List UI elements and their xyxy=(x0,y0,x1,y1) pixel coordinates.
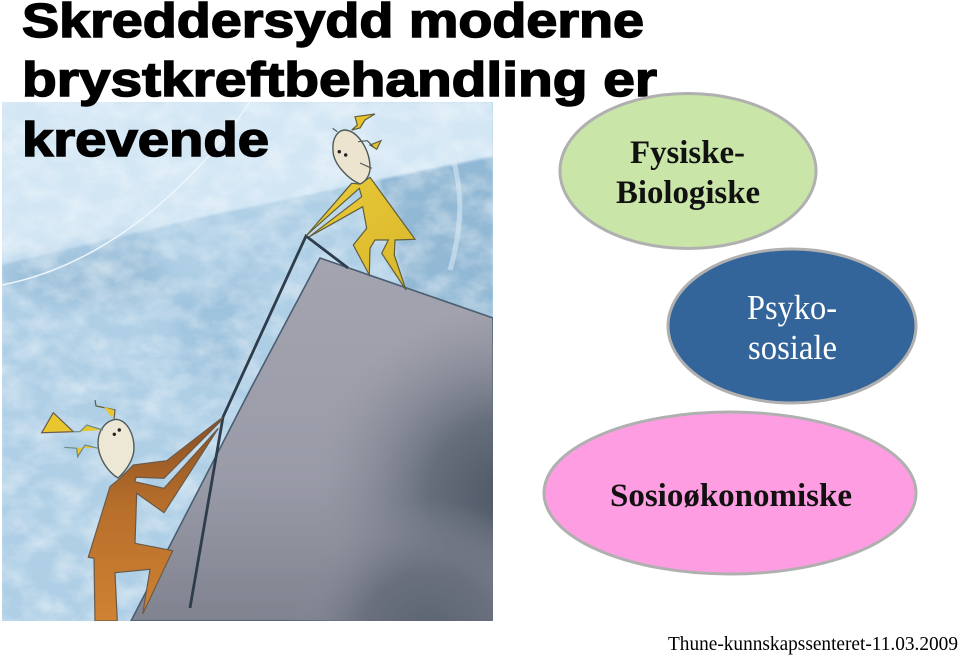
title: krevende xyxy=(22,114,269,167)
ellipse: Fysiske-Biologiske: Fysiske- xyxy=(630,135,745,171)
figure: yellow climber on top xyxy=(306,114,415,290)
ellipse: Psykososiale: Psyko- xyxy=(747,288,837,327)
ellipse: Fysiske-Biologiske xyxy=(560,94,816,248)
ellipse: Sosioøkonomiske: Sosioøkonomiske xyxy=(610,478,852,514)
illustration: two climbers on a mountain xyxy=(2,102,493,621)
hair xyxy=(352,114,375,130)
ellipse: Sosioøkonomiske xyxy=(544,412,916,574)
mountain xyxy=(131,258,493,621)
ellipse: Fysiske-Biologiske: Biologiske xyxy=(616,175,760,211)
title xyxy=(22,0,657,167)
ellipse: Psykososiale: sosiale xyxy=(748,328,837,367)
sky background xyxy=(2,102,493,621)
head xyxy=(333,130,370,184)
figure: orange climber below xyxy=(42,400,223,621)
footer credit: Thune-kunnskapssenteret-11.03.2009 xyxy=(668,634,958,655)
ellipse: Psykososiale xyxy=(668,249,916,403)
title: brystkreftbehandling er xyxy=(22,54,657,107)
hair xyxy=(42,413,73,433)
head xyxy=(98,419,134,478)
rope xyxy=(190,236,348,608)
